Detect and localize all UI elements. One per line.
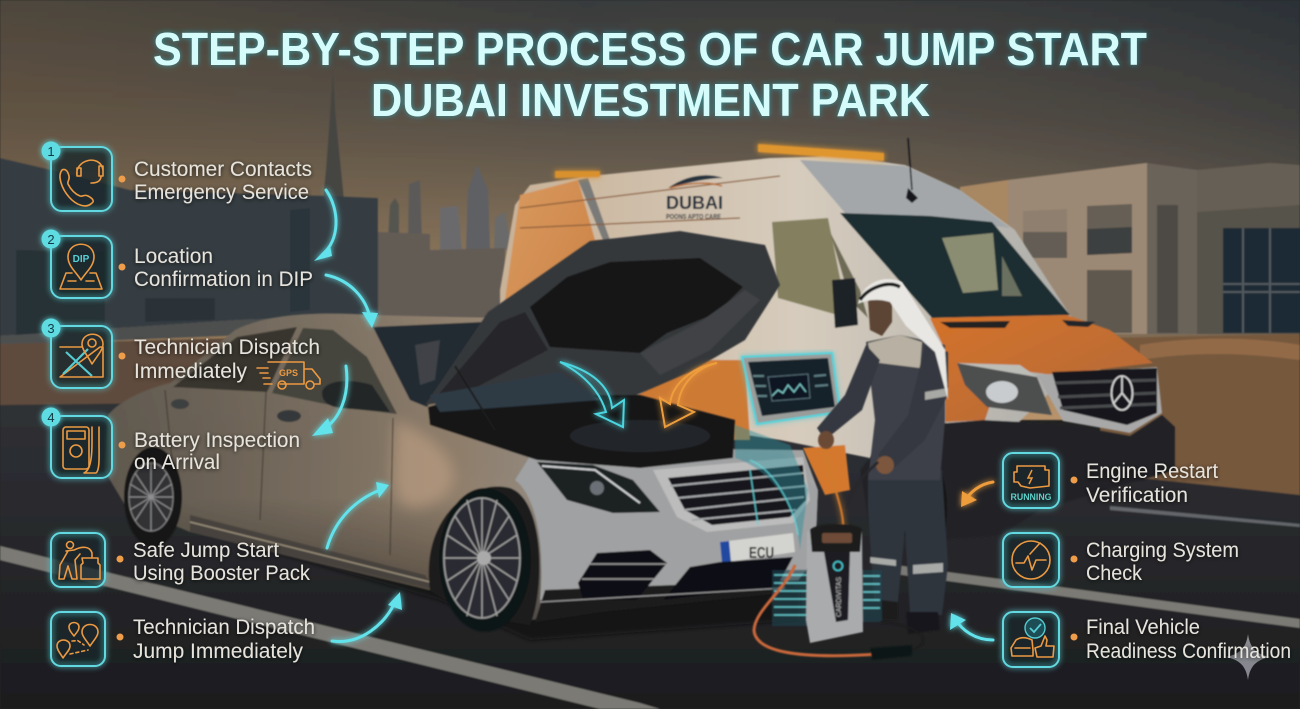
icon: GPS truck <box>257 362 320 389</box>
number plate <box>720 533 795 563</box>
car sill <box>190 515 435 590</box>
icon card: engine running: RUNNING <box>1010 492 1052 502</box>
right building <box>960 180 1008 335</box>
car hood inner, open <box>425 231 780 405</box>
silver sedan <box>104 231 818 640</box>
step 5 dot <box>116 556 124 562</box>
step 5 label: Safe Jump Start <box>133 539 279 562</box>
arrow 1 to 2 <box>314 190 336 261</box>
step 2 dot <box>118 264 126 270</box>
arrow engine restart <box>961 482 993 507</box>
van rear orange panel <box>500 180 608 400</box>
title line 2: DUBAI INVESTMENT PARK <box>371 74 930 126</box>
icon card: map with pin: 3 <box>47 321 55 336</box>
van grille and star <box>1037 367 1162 433</box>
legs <box>868 470 948 615</box>
asphalt road <box>0 400 1300 709</box>
step 1 label <box>134 158 312 204</box>
step 7 label: Verification <box>1086 484 1188 507</box>
connector arrows between steps <box>312 190 993 642</box>
car shadow <box>130 510 800 640</box>
step 7: engine restart <box>1003 453 1218 508</box>
arrow 2 to 3 <box>326 275 378 328</box>
step 5: safe jump start <box>51 533 310 587</box>
step 9 dot <box>1070 634 1078 640</box>
step 1 label: Emergency Service <box>134 181 309 204</box>
booster pack with cables <box>754 450 923 660</box>
icon card: engine running <box>1003 453 1059 508</box>
van lower orange side <box>630 360 750 440</box>
van logo: DUBAI <box>666 193 723 213</box>
icon card: multimeter <box>42 408 112 478</box>
step 2 label <box>134 245 313 291</box>
van hood <box>930 315 1153 422</box>
step 8 label <box>1086 539 1239 585</box>
coils <box>772 570 882 626</box>
torso <box>866 335 945 480</box>
step 6: technician dispatch jump <box>51 612 315 666</box>
arrow 4 to 5 <box>327 482 389 548</box>
step 3 label <box>134 336 320 383</box>
front fender <box>515 445 818 610</box>
step 7 label: Engine Restart <box>1086 460 1218 483</box>
icon card: gauge <box>1003 533 1059 587</box>
step 6 label: Technician Dispatch <box>133 616 315 639</box>
icon: GPS truck: GPS <box>279 368 298 378</box>
step 1 label: Customer Contacts <box>134 158 312 181</box>
car bright highlight <box>392 420 454 508</box>
step 1: customer contacts <box>42 142 312 211</box>
step 9: final confirmation <box>1003 612 1291 680</box>
step 8 label: Check <box>1086 562 1142 585</box>
road markings <box>0 506 1300 709</box>
step 3: technician dispatch <box>42 318 320 389</box>
step 4 dot <box>118 442 126 448</box>
roof beacons <box>555 144 884 178</box>
step 5 label <box>133 539 310 585</box>
step 8: charging check <box>1003 533 1239 587</box>
step 2: location confirmation <box>42 230 313 298</box>
icon card: DIP pin <box>42 230 112 298</box>
step 6 label: Jump Immediately <box>133 640 303 663</box>
front wheel <box>429 487 540 632</box>
service van <box>500 138 1175 540</box>
van logo: POONS APTO CARE <box>666 214 721 221</box>
arrow 3 to 4 <box>312 366 347 436</box>
desert sand <box>1100 334 1300 500</box>
title <box>153 23 1147 126</box>
car grille <box>653 457 810 532</box>
diagnostic tablet <box>742 353 840 424</box>
step 3 dot <box>118 352 126 360</box>
step 2 label: Confirmation in DIP <box>134 268 313 291</box>
title line 1: STEP-BY-STEP PROCESS OF CAR JUMP START <box>153 23 1147 75</box>
icon card: map with pin <box>42 318 112 388</box>
booster pack with cables: CARDIVITAS <box>836 577 843 617</box>
icon card: worker with booster <box>51 533 105 587</box>
step 9 label: Final Vehicle <box>1086 616 1200 639</box>
step 7 dot <box>1070 476 1078 484</box>
step 5 label: Using Booster Pack <box>133 562 310 585</box>
icon card: route pins <box>51 612 105 666</box>
head and ghutra <box>868 296 892 336</box>
icon card: headset phone: 1 <box>47 144 55 159</box>
icon card: DIP pin: 2 <box>47 232 55 247</box>
step 4: battery inspection <box>42 408 300 478</box>
step 1 dot <box>118 176 126 182</box>
engine bay flow arrows <box>560 362 717 427</box>
car panel lines and handles <box>165 390 393 555</box>
icon card: multimeter: 4 <box>47 410 55 425</box>
car headlight <box>537 462 660 513</box>
step 4 label: Battery Inspection <box>134 429 300 452</box>
step 2 label: Location <box>134 245 213 268</box>
left arm <box>817 345 880 440</box>
car windows <box>173 327 297 392</box>
arrow final check <box>950 613 993 640</box>
arrow 5 to 6 <box>332 592 402 642</box>
left warehouse <box>0 158 378 336</box>
right arm <box>878 345 948 470</box>
step 3 label: Technician Dispatch <box>134 336 320 359</box>
cyan hollow arrow <box>560 362 624 427</box>
step 6 dot <box>116 634 124 640</box>
step 4 label: on Arrival <box>134 451 220 474</box>
van bumper and wheel <box>860 415 1175 540</box>
step 3 label: Immediately <box>134 360 247 383</box>
step 8 label: Charging System <box>1086 539 1239 562</box>
icon card: car and thumbs up <box>1003 612 1059 667</box>
lower intakes <box>578 550 667 600</box>
car side mirror <box>322 381 390 412</box>
orange hollow arrow <box>660 363 717 427</box>
van windows <box>772 218 848 318</box>
step 8 dot <box>1070 556 1078 562</box>
car body <box>104 314 818 620</box>
boots <box>906 612 940 634</box>
van logo <box>666 175 723 221</box>
van mirror <box>832 278 858 328</box>
rear wheel <box>124 447 182 547</box>
icon card: DIP pin: DIP <box>73 254 90 265</box>
pack case <box>806 527 863 643</box>
icon card: headset phone <box>42 142 112 211</box>
engine bay <box>428 395 735 468</box>
van body <box>500 156 1100 470</box>
step 6 label <box>133 616 315 663</box>
van headlight <box>957 363 1052 415</box>
step 4 label <box>134 429 300 474</box>
number plate: ECU <box>749 545 774 562</box>
technician in uniform <box>817 279 948 634</box>
step 9 label <box>1086 616 1291 663</box>
hologram overlay <box>735 425 808 550</box>
watermark sparkle <box>1226 634 1270 680</box>
step 7 label <box>1086 460 1218 507</box>
Dubai skyline towers <box>323 70 512 318</box>
cables <box>754 565 880 656</box>
